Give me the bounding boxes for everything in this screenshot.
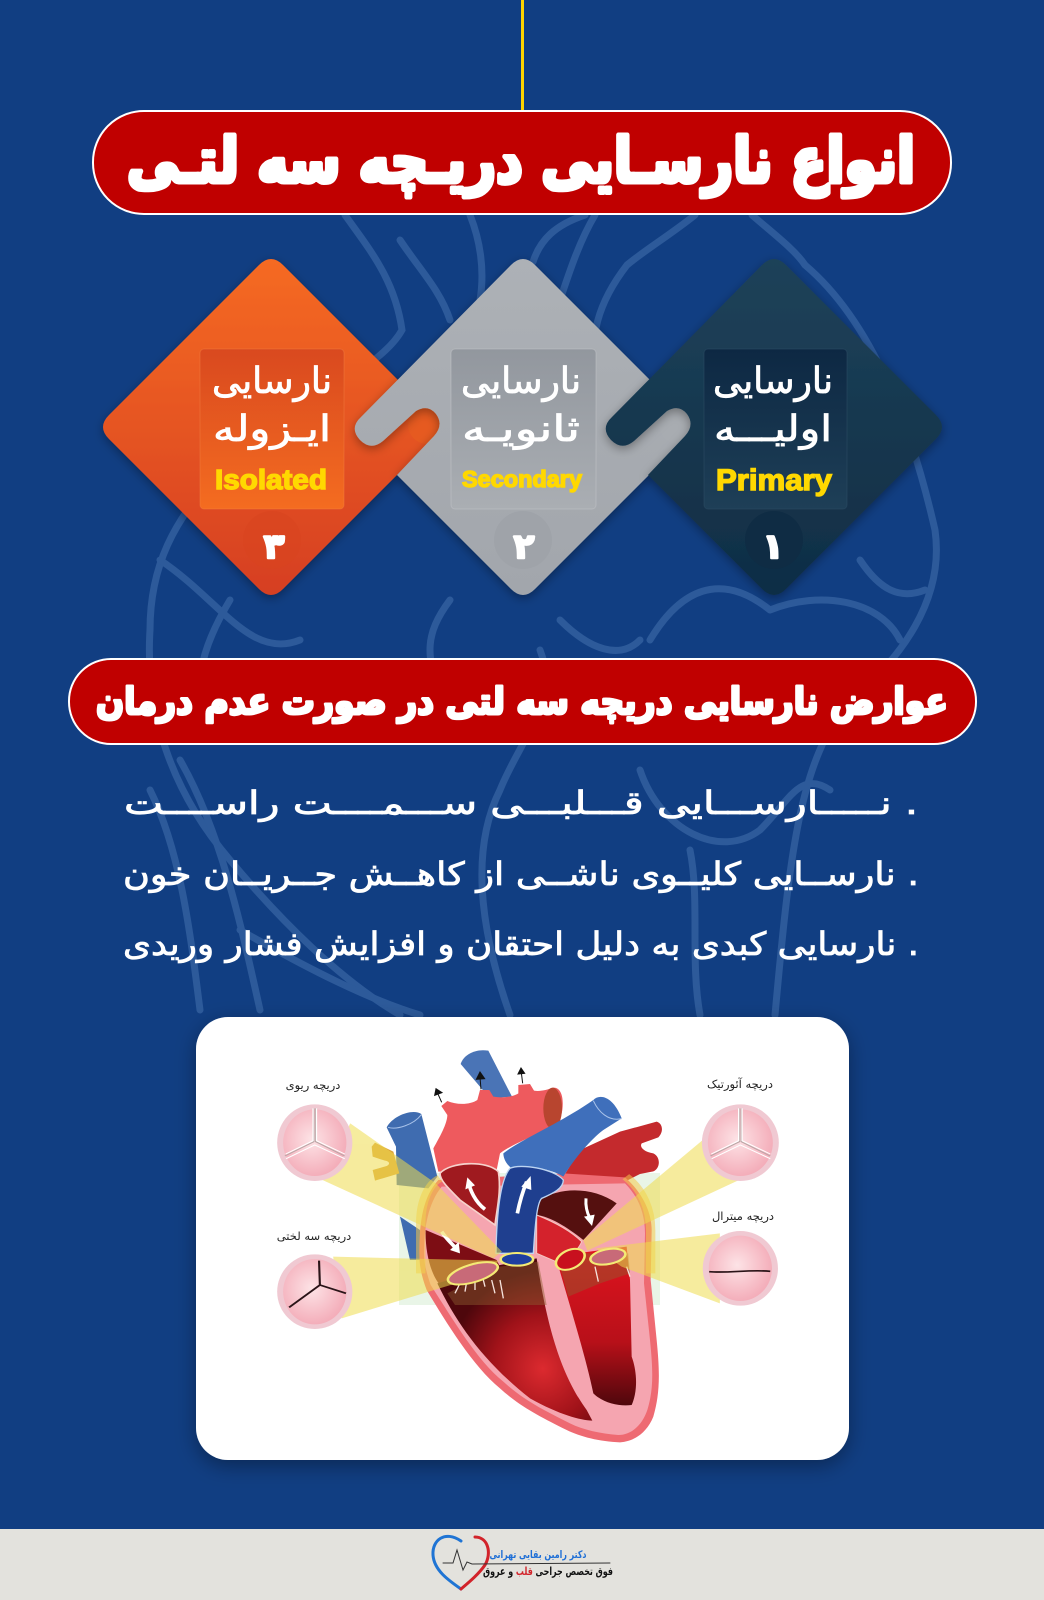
complications banner xyxy=(69,659,976,744)
right atrium xyxy=(426,1230,500,1285)
title text: انواع نارسـایی دریـچه سه لتـی xyxy=(127,124,915,197)
footer bar xyxy=(0,1529,1044,1600)
complications list: . نارسایی کبدی به دلیل احتقان و افزایش فشار وریدی xyxy=(123,925,919,963)
label: isolated: نارسایی xyxy=(212,361,332,402)
orange puzzle tab xyxy=(408,406,446,444)
gray inner card xyxy=(451,349,596,509)
label: secondary: ثانویـه xyxy=(462,409,580,450)
heart illustration xyxy=(372,1050,662,1442)
valve disc: tricuspid xyxy=(277,1254,352,1329)
label: primary: Primary xyxy=(716,464,832,497)
title banner xyxy=(93,111,951,214)
label: isolated: Isolated xyxy=(215,464,327,495)
highlight band xyxy=(421,1177,651,1273)
footer logo xyxy=(433,1536,613,1589)
label: primary: نارسایی xyxy=(713,361,833,402)
diagram labels: دریچه آئورتیک xyxy=(707,1077,773,1092)
panel: secondary type xyxy=(355,259,697,595)
chordae xyxy=(455,1267,630,1298)
pulmonary vein stub xyxy=(372,1143,399,1181)
right pulmonary vessel xyxy=(563,1122,662,1182)
label: primary: اولیـــه xyxy=(714,409,832,450)
highlight box behind heart xyxy=(399,1173,660,1305)
diagram labels: دریچه میترال xyxy=(712,1209,774,1224)
left atrium xyxy=(537,1190,617,1240)
type numbers: ۱ xyxy=(763,527,783,567)
pulmonary trunk inner xyxy=(440,1164,499,1225)
left ventricle xyxy=(557,1247,636,1405)
label: secondary: نارسایی xyxy=(461,361,581,402)
yellow callout beams xyxy=(277,1104,779,1329)
logo subtitle: فوق تخصص جراحی قلب و عروق xyxy=(483,1565,613,1578)
valve openings xyxy=(444,1245,628,1289)
vena cava xyxy=(387,1112,437,1188)
gray puzzle diamond xyxy=(355,259,691,595)
blue outflow tract xyxy=(503,1097,622,1177)
diagram labels: دریچه ریوی xyxy=(286,1078,340,1093)
label: isolated: ایـزوله xyxy=(213,409,331,450)
label: primary xyxy=(713,361,833,497)
valve disc: aortic xyxy=(702,1104,779,1181)
type numbers: ۳ xyxy=(264,527,285,567)
panel: primary type xyxy=(606,259,942,595)
diagram labels xyxy=(277,1077,774,1244)
orange diamond xyxy=(103,259,439,595)
orange number badge xyxy=(243,511,301,569)
label: secondary xyxy=(461,361,582,492)
diagram labels: دریچه سه لختی xyxy=(277,1229,351,1244)
complications list: . نـــــارســـایی قـــلبـــی ســـمــــت راســــت xyxy=(124,784,918,822)
heart wall xyxy=(419,1173,659,1442)
orange inner card xyxy=(200,349,344,509)
gray puzzle tab xyxy=(659,406,697,444)
right ventricle xyxy=(437,1258,592,1421)
panel: heart diagram card xyxy=(196,1017,849,1460)
white flow arrows xyxy=(442,1176,595,1253)
panel: isolated type xyxy=(103,259,446,595)
small black arrows xyxy=(435,1068,525,1102)
complications heading: عوارض نارسایی دریچه سه لتی در صورت عدم درمان xyxy=(96,680,948,724)
dark puzzle diamond xyxy=(606,259,942,595)
dark inner card xyxy=(704,349,847,509)
type numbers: ۲ xyxy=(514,527,535,567)
gray number badge xyxy=(494,511,552,569)
label: secondary: Secondary xyxy=(462,466,582,492)
logo heart xyxy=(433,1536,610,1589)
logo name: دکتر رامین بقایی تهرانی xyxy=(490,1549,587,1561)
complications list xyxy=(123,784,919,963)
pulmonary artery vessel xyxy=(461,1050,512,1098)
dark number badge xyxy=(745,511,803,569)
yellow connector line xyxy=(521,0,524,111)
chamber wash xyxy=(447,1253,630,1305)
valve disc: pulmonary xyxy=(277,1104,352,1181)
valve disc: mitral xyxy=(703,1231,778,1306)
background heart line art xyxy=(149,215,936,1015)
aortic arch xyxy=(433,1084,563,1172)
type numbers xyxy=(264,527,783,567)
complications list: . نارســایی کلیــوی ناشــی از کاهــش جــریــان خون xyxy=(123,855,919,893)
label: isolated xyxy=(212,361,332,495)
